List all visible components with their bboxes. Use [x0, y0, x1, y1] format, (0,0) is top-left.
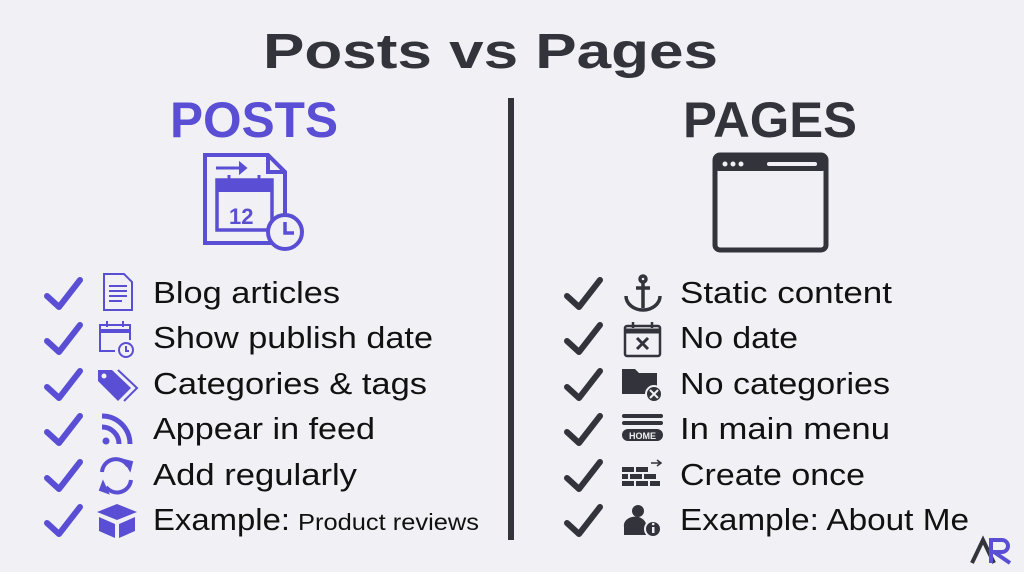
list: posts: Product reviews	[298, 509, 479, 535]
list: posts: Add regularly	[153, 457, 358, 492]
icon: folder x	[622, 369, 662, 402]
list: posts	[47, 274, 479, 538]
list: posts: Blog articles	[153, 275, 340, 310]
list: pages: Create once	[680, 457, 865, 492]
list: posts: Categories & tags	[153, 366, 427, 401]
icon: box	[97, 504, 137, 538]
list: posts: Show publish date	[153, 320, 433, 355]
icon: user info	[624, 505, 661, 537]
list: posts: Example:	[153, 502, 290, 537]
list: pages: No categories	[680, 366, 890, 401]
icon: document	[104, 274, 132, 310]
icon: anchor	[626, 276, 660, 310]
divider	[508, 98, 514, 540]
icon: bricks arrow	[622, 460, 661, 486]
list: pages: Example: About Me	[680, 502, 969, 537]
logo: AR	[972, 540, 1010, 563]
list: pages: No date	[680, 320, 798, 355]
icon: home menu: HOME	[629, 431, 656, 441]
heading: pages: PAGES	[683, 92, 857, 148]
icon: posts calendar document	[205, 155, 302, 249]
list: pages	[567, 275, 969, 537]
icon: tags	[98, 370, 137, 401]
icon: rss	[102, 416, 130, 444]
icon: posts calendar document: 12	[229, 204, 253, 229]
icon: home menu	[622, 414, 663, 441]
title: Posts vs Pages	[263, 25, 718, 79]
icon: calendar x	[625, 322, 660, 356]
list: posts: Appear in feed	[153, 411, 375, 446]
list: pages: In main menu	[680, 411, 890, 446]
icon: calendar clock	[100, 321, 133, 357]
icon: refresh	[100, 459, 132, 493]
list: pages: Static content	[680, 275, 892, 310]
heading: posts: POSTS	[170, 92, 338, 148]
icon: pages browser window	[715, 155, 826, 250]
